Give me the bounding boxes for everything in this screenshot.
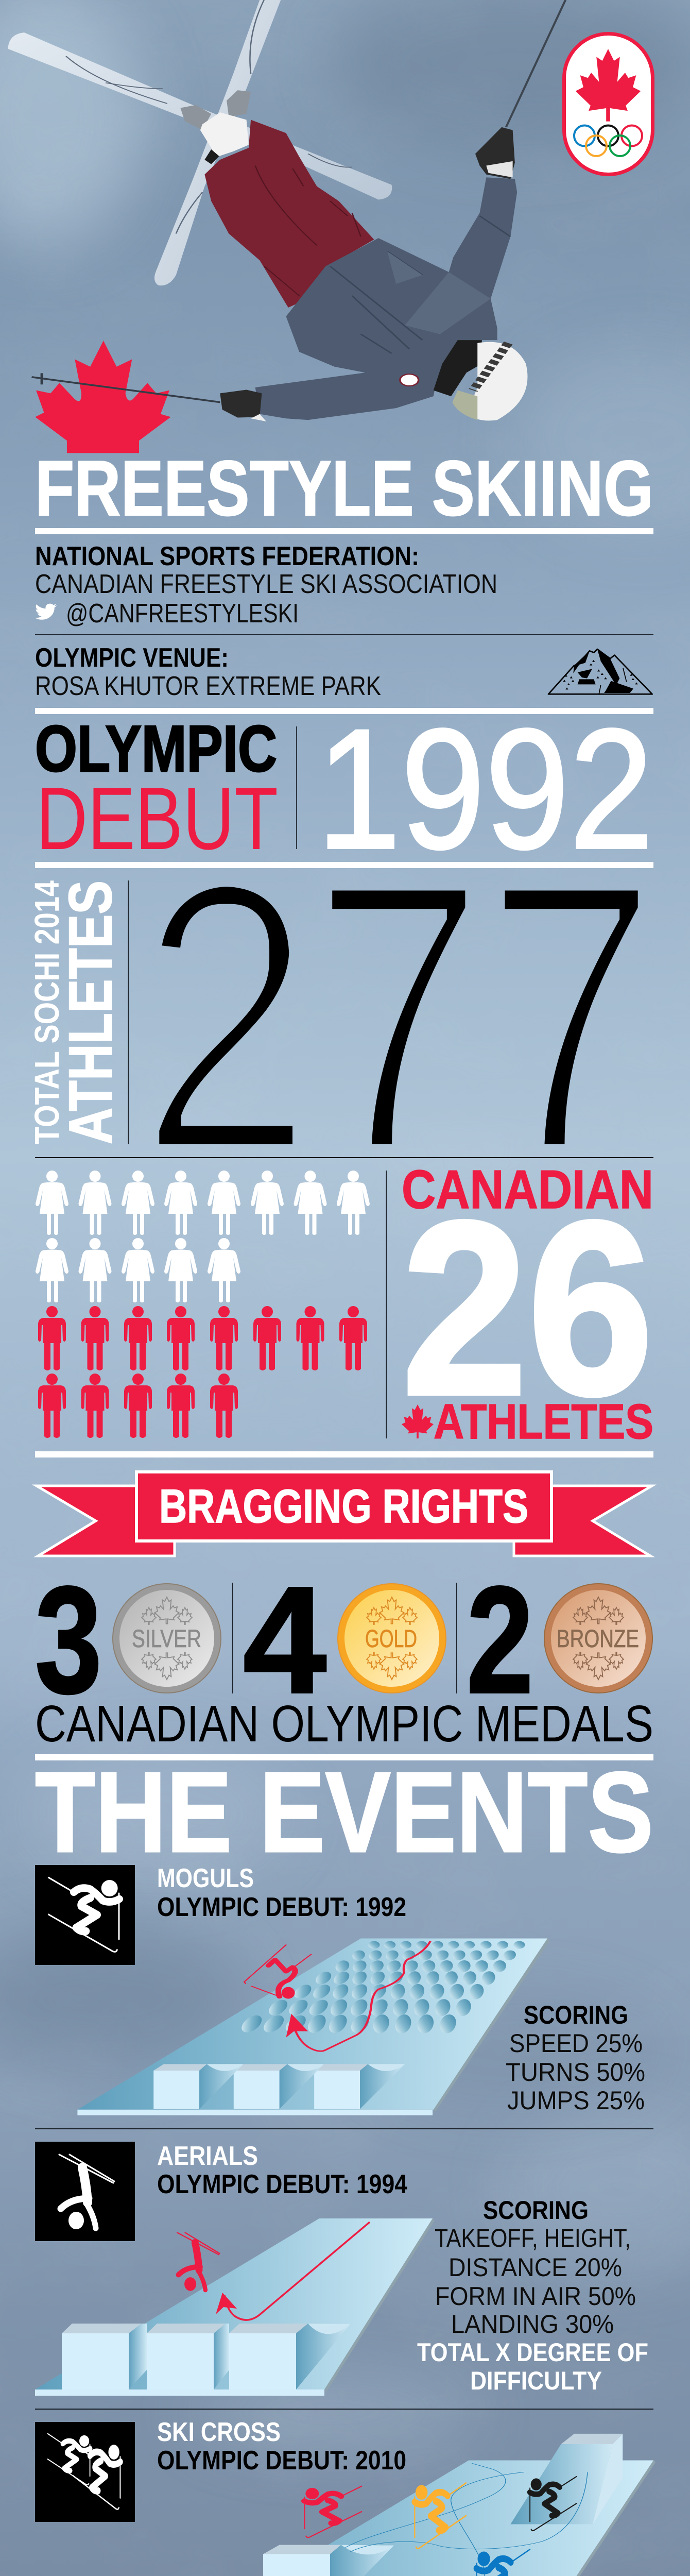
checker band: [473, 343, 508, 391]
banner centre: [136, 1472, 551, 1541]
silver medal: [113, 1584, 221, 1693]
icon: small maple leaf: [402, 1404, 434, 1438]
icon: aerials: [35, 2142, 135, 2241]
medal counts: [35, 1555, 652, 1725]
silver medal: SILVER: [132, 1625, 201, 1653]
debut label: DEBUT: [36, 769, 278, 868]
number 26: 26: [402, 1170, 653, 1446]
aerials scoring: [417, 2196, 648, 2395]
venue block: [35, 643, 652, 701]
moguls scoring: TURNS 50%: [506, 2058, 645, 2087]
moguls course diagram: [77, 1938, 550, 2115]
icon: moguls: [35, 1865, 135, 1965]
ski cross title: SKI CROSS: [157, 2417, 281, 2447]
silver count: 3: [35, 1555, 102, 1725]
blue skier: [476, 2549, 530, 2576]
banner right tail: [514, 1486, 652, 1556]
athletes vertical label: ATHLETES: [57, 880, 125, 1144]
canadian athletes block: [402, 1159, 653, 1449]
icon: ski cross: [35, 2422, 135, 2522]
cuff lower: [251, 414, 266, 421]
venue name: ROSA KHUTOR EXTREME PARK: [35, 671, 381, 701]
aerials debut: OLYMPIC DEBUT: 1994: [157, 2170, 407, 2199]
red moguls skier: [244, 1945, 311, 1999]
ski bindings: [180, 90, 251, 130]
aerials scoring: DIFFICULTY: [470, 2366, 602, 2395]
aerials scoring: TOTAL X DEGREE OF: [417, 2338, 648, 2367]
balaclava: [434, 340, 482, 396]
ski boots: [200, 112, 249, 157]
federation heading: NATIONAL SPORTS FEDERATION:: [35, 541, 419, 571]
moguls title: MOGULS: [157, 1863, 254, 1893]
olympic rings: [574, 126, 642, 156]
boot base: [204, 149, 219, 164]
aerials title: AERIALS: [157, 2141, 258, 2171]
glove lower: [220, 390, 262, 417]
gold medal: [338, 1584, 446, 1693]
ski cross course diagram: [188, 2434, 656, 2576]
glove white: [486, 161, 513, 177]
athletes label: ATHLETES: [434, 1394, 653, 1449]
olympic label: OLYMPIC: [35, 712, 277, 785]
moguls scoring: SCORING: [524, 2001, 628, 2029]
gold medal: GOLD: [365, 1625, 417, 1653]
aerials scoring: TAKEOFF, HEIGHT,: [435, 2224, 631, 2252]
venue heading: OLYMPIC VENUE:: [35, 643, 229, 673]
banner: bragging rights: [37, 1472, 652, 1556]
pants folds: [255, 165, 361, 296]
bronze medal: BRONZE: [557, 1625, 639, 1653]
moguls scoring: [506, 2001, 645, 2115]
moguls scoring: JUMPS 25%: [507, 2086, 645, 2115]
female athletes: [36, 1171, 370, 1302]
logo maple leaf: [576, 49, 641, 122]
aerials course diagram: [35, 2218, 435, 2396]
aerials scoring: SCORING: [483, 2196, 589, 2225]
federation block: [35, 541, 497, 629]
aerials scoring: LANDING 30%: [451, 2310, 614, 2338]
aerials scoring: FORM IN AIR 50%: [435, 2282, 636, 2311]
black skier: [530, 2477, 576, 2531]
banner left tail: [37, 1486, 175, 1556]
icon: mountain venue: [548, 649, 652, 694]
canadian label: CANADIAN: [402, 1159, 653, 1220]
olympic team logo: [564, 34, 653, 174]
jacket folds: [330, 216, 510, 353]
orange skier: [415, 2483, 466, 2549]
moguls scoring: SPEED 25%: [509, 2029, 643, 2058]
banner text: BRAGGING RIGHTS: [159, 1480, 528, 1533]
ski graphics: [66, 0, 352, 233]
pole right: [506, 0, 565, 127]
jacket lighter panels: [387, 251, 491, 334]
glove upper: [475, 127, 515, 179]
total sochi label: TOTAL SOCHI 2014: [28, 880, 66, 1144]
badge: [400, 374, 419, 386]
grey jacket: [255, 177, 517, 420]
debut year: 1992: [317, 693, 653, 885]
male athletes: [38, 1306, 367, 1438]
bronze medal: [544, 1584, 652, 1693]
federation name: CANADIAN FREESTYLE SKI ASSOCIATION: [35, 569, 497, 599]
maroon pants: [204, 120, 374, 308]
moguls debut: OLYMPIC DEBUT: 1992: [157, 1892, 406, 1922]
pictogram: athlete counts: [36, 1171, 370, 1438]
red skier: [304, 2486, 361, 2537]
olympic debut block: [35, 693, 653, 885]
skier photo illustration: [8, 0, 565, 421]
icon: twitter bird: [35, 604, 57, 620]
goggles: [453, 391, 477, 420]
ski cross debut: OLYMPIC DEBUT: 2010: [157, 2446, 406, 2476]
big maple leaf: [32, 341, 220, 453]
aerials scoring: DISTANCE 20%: [449, 2253, 622, 2282]
total athletes block: [28, 802, 658, 1231]
panel: moguls: [35, 1863, 645, 2115]
panel: aerials: [35, 2141, 648, 2396]
gold count: 4: [243, 1555, 327, 1725]
white helmet: [467, 342, 528, 421]
bronze count: 2: [467, 1555, 533, 1725]
ski one: [8, 32, 392, 199]
twitter handle: @CANFREESTYLESKI: [66, 599, 299, 629]
panel: ski cross: [35, 2417, 656, 2576]
ski two: [154, 0, 281, 285]
ski pole left: [32, 373, 220, 402]
